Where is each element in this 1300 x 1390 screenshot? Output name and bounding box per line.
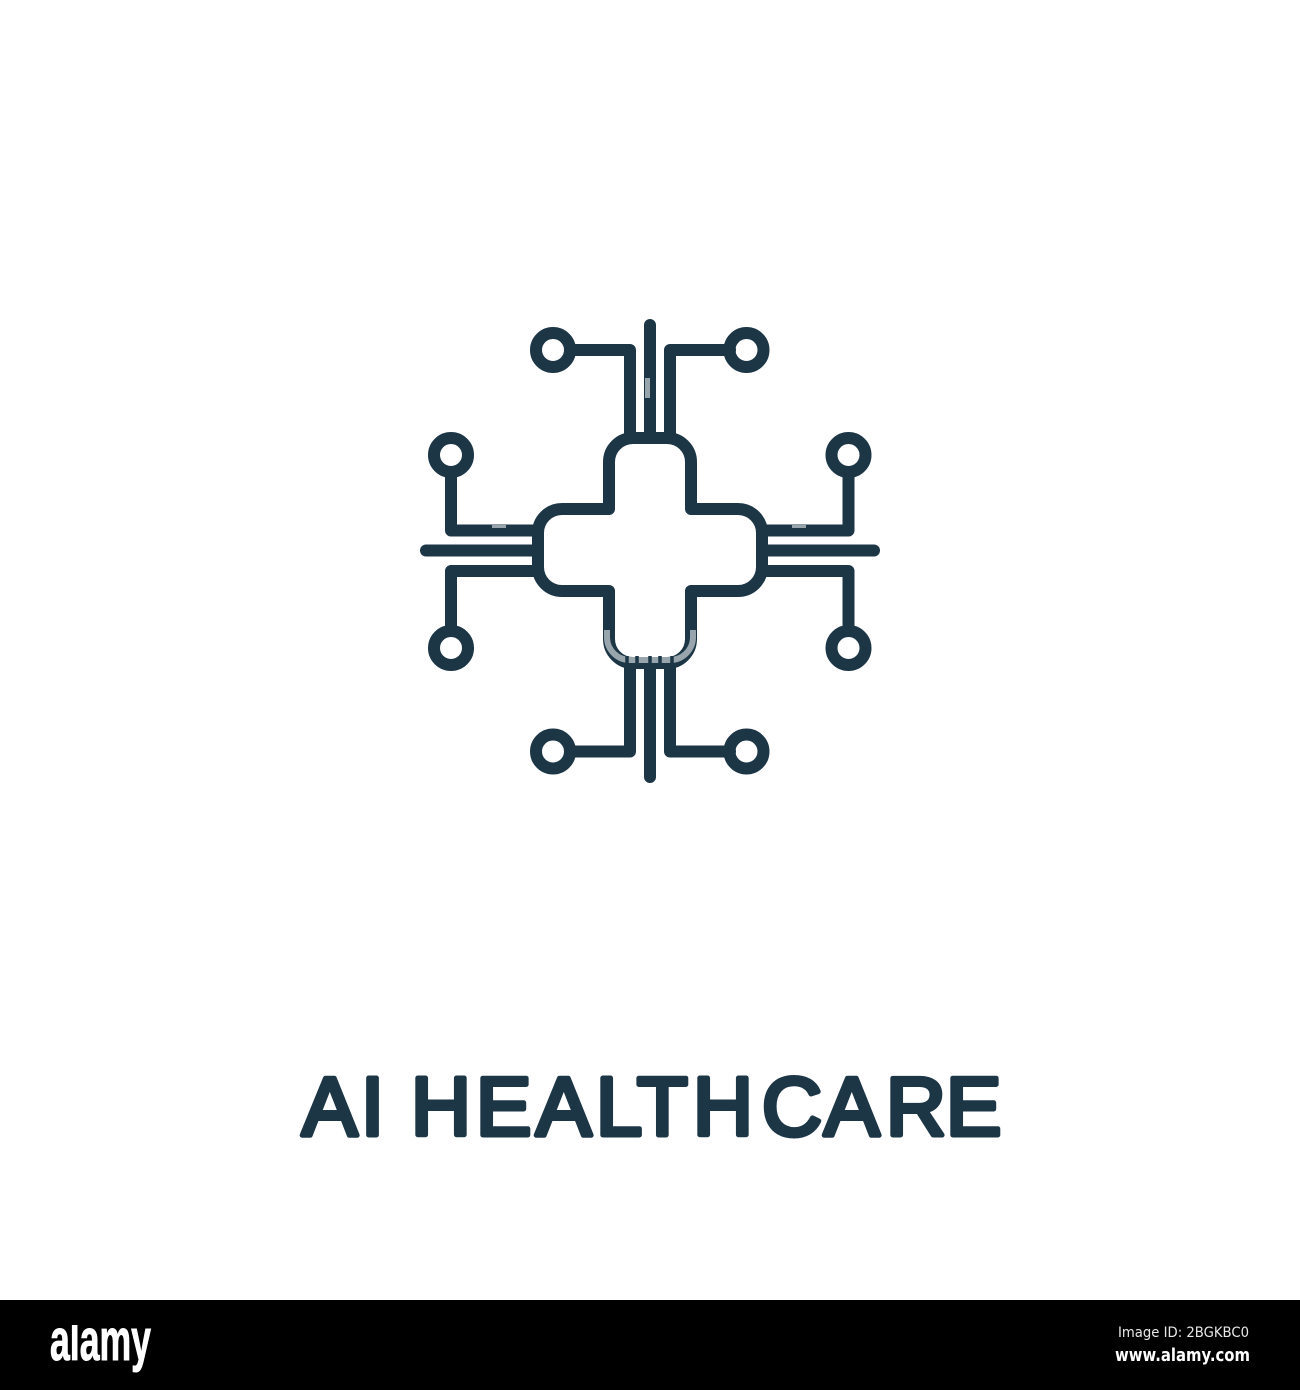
circuit lines — [426, 325, 874, 777]
cross outline — [538, 438, 762, 663]
image id: Image ID: 2BGKBC0 — [1118, 1325, 1249, 1341]
footer bar — [0, 1300, 1300, 1390]
watermark traces on icon — [492, 378, 806, 664]
circuit nodes — [434, 333, 866, 768]
alamy logo: alamy — [50, 1308, 151, 1373]
website: www.alamy.com — [1115, 1345, 1250, 1366]
title: AI HEALTHCARE — [302, 1060, 1001, 1153]
icon: AI healthcare circuit cross — [426, 325, 874, 777]
